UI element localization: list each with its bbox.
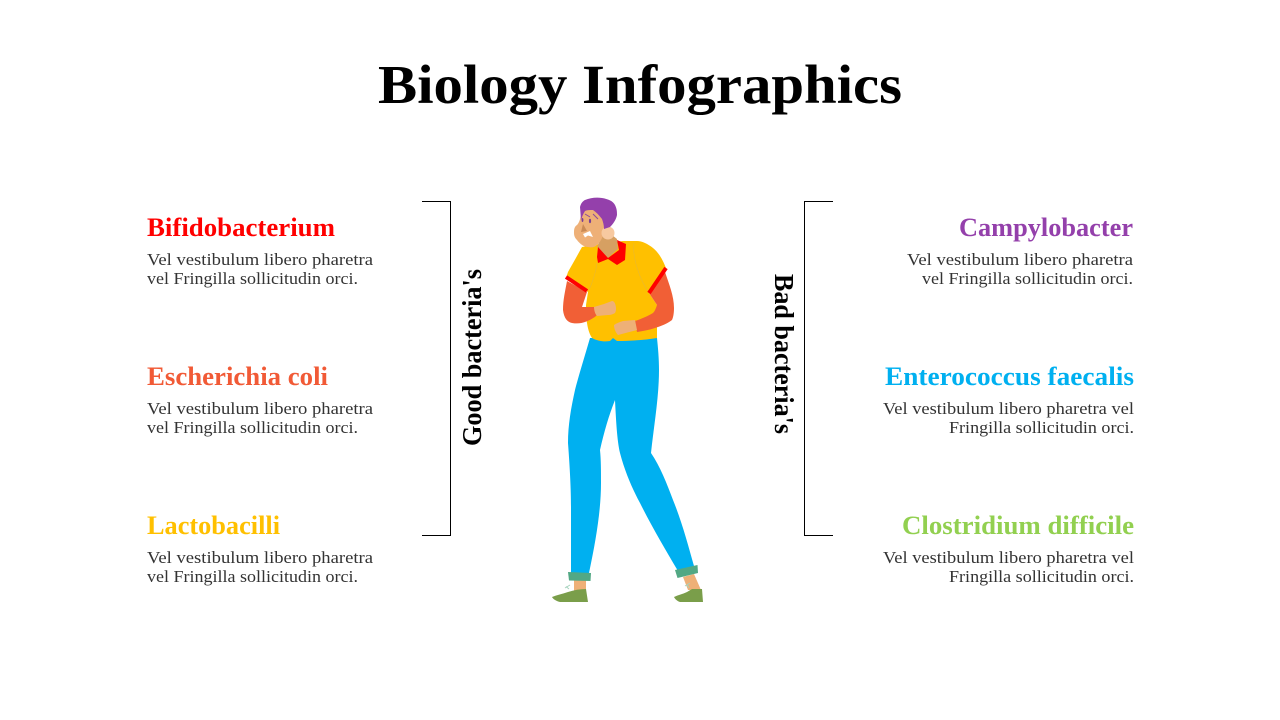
hand left [594, 301, 616, 316]
cuff right [675, 565, 698, 578]
label: Good bacteria's: Good bacteria's [457, 269, 487, 446]
trousers [568, 338, 694, 573]
sleeve band left [566, 277, 587, 291]
panel: good bacteria list [147, 213, 373, 586]
title: Biology Infographics [378, 54, 902, 115]
item: Escherichia coli [147, 362, 373, 437]
item: Bifidobacterium: vel Fringilla sollicitudin orci. [147, 269, 358, 288]
item: Campylobacter [907, 213, 1133, 288]
ankle right [683, 574, 701, 590]
item: Clostridium difficile [883, 511, 1134, 586]
item: Bifidobacterium: Vel vestibulum libero pharetra [147, 250, 373, 269]
hand right [614, 320, 637, 335]
item: Enterococcus faecalis: Vel vestibulum libero pharetra vel [883, 399, 1134, 418]
item: Campylobacter: vel Fringilla sollicitudin orci. [922, 269, 1133, 288]
item: Escherichia coli: vel Fringilla sollicitudin orci. [147, 418, 358, 437]
shoe right [674, 589, 703, 602]
shirt [566, 241, 666, 341]
item: Escherichia coli: Vel vestibulum libero pharetra [147, 399, 373, 418]
left arm [563, 281, 597, 323]
item: Enterococcus faecalis [883, 362, 1134, 437]
item: Lactobacilli: Vel vestibulum libero pharetra [147, 548, 373, 567]
item: Lactobacilli: vel Fringilla sollicitudin orci. [147, 567, 358, 586]
item: Lactobacilli: Lactobacilli [147, 511, 280, 540]
right arm [635, 272, 674, 332]
shoelace left [565, 585, 570, 589]
item: Escherichia coli: Escherichia coli [147, 362, 328, 391]
item: Bifidobacterium [147, 213, 373, 288]
ear [602, 226, 614, 240]
face [574, 208, 605, 247]
panel: bad bacteria list [883, 213, 1134, 586]
bracket: bad bacteria [804, 202, 833, 536]
item: Enterococcus faecalis: Enterococcus faecalis [885, 362, 1134, 391]
eyes and brows [585, 214, 598, 219]
sleeve band right [649, 268, 666, 293]
item: Lactobacilli [147, 511, 373, 586]
shirt seams [588, 243, 649, 293]
nose [581, 224, 587, 232]
illustration: man with stomach ache [552, 198, 703, 602]
label: Bad bacteria's: Bad bacteria's [769, 274, 799, 434]
neck [597, 233, 618, 258]
shoe left [552, 589, 588, 602]
mouth [583, 231, 593, 238]
item: Clostridium difficile: Clostridium difficile [902, 511, 1134, 540]
item: Campylobacter: Campylobacter [959, 213, 1133, 242]
collar [597, 240, 626, 265]
shoelace right [685, 583, 690, 588]
item: Enterococcus faecalis: Fringilla sollicitudin orci. [949, 418, 1134, 437]
bracket: good bacteria [422, 202, 450, 536]
ankle left [574, 580, 586, 591]
cuff left [568, 572, 591, 581]
item: Bifidobacterium: Bifidobacterium [147, 213, 335, 242]
item: Clostridium difficile: Vel vestibulum libero pharetra vel [883, 548, 1134, 567]
item: Campylobacter: Vel vestibulum libero pharetra [907, 250, 1133, 269]
hair [580, 198, 617, 229]
item: Clostridium difficile: Fringilla sollicitudin orci. [949, 567, 1134, 586]
